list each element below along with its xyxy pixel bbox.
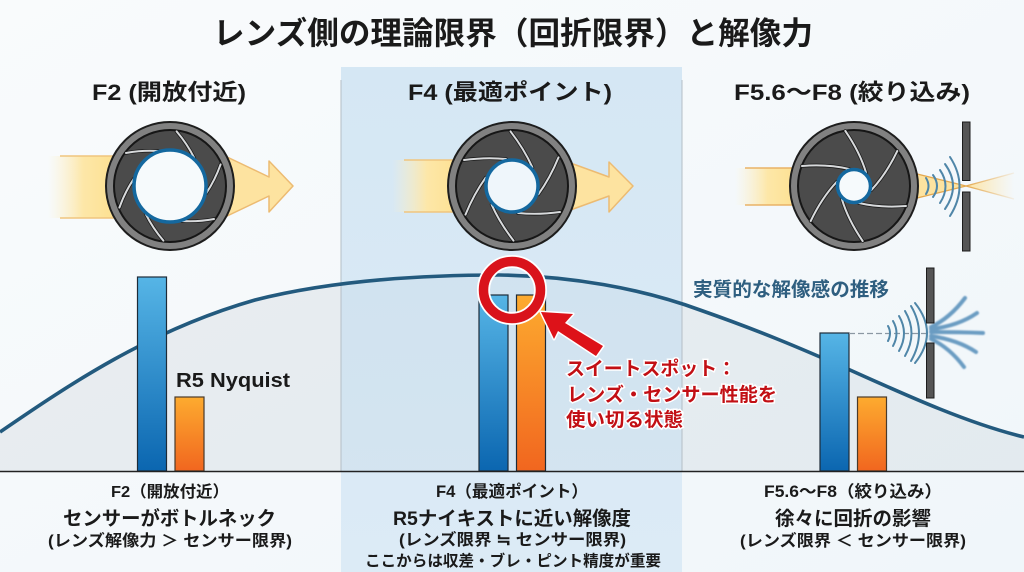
caption: F4: R5ナイキストに近い解像度 xyxy=(393,508,631,530)
caption: F2: センサーがボトルネック xyxy=(63,507,276,530)
callout: sweet spot: スイートスポット： xyxy=(566,357,736,380)
caption: F4: (レンズ限界 ≒ センサー限界) xyxy=(399,530,626,549)
heading: F2: F2 (開放付近) xyxy=(92,80,246,105)
callout: sweet spot xyxy=(566,357,777,431)
resolution curve area xyxy=(0,275,1024,471)
caption: F4: ここからは収差・ブレ・ピント精度が重要 xyxy=(365,551,661,570)
icon: upper sensor slit xyxy=(962,122,970,251)
beam arrow: F2 xyxy=(48,156,293,218)
arrow: pointing at sweet spot xyxy=(541,312,603,356)
icon: diffraction waves and scatter at lower slit xyxy=(888,298,983,367)
beam: F5.6-F8 converging to sensor xyxy=(735,168,1014,205)
bar chart: F4 xyxy=(479,295,546,471)
heading: F4: F4 (最適ポイント) xyxy=(408,80,612,105)
beam arrow: F4 xyxy=(392,160,633,212)
caption: F2: (レンズ解像力 ＞ センサー限界) xyxy=(48,531,292,550)
bar chart: F2 xyxy=(138,277,204,471)
center panel curve area xyxy=(0,275,700,471)
caption: F4 xyxy=(365,481,661,570)
caption: F5.6-F8: F5.6～F8（絞り込み） xyxy=(764,482,942,501)
caption: F5.6-F8: (レンズ限界 ＜ センサー限界) xyxy=(740,531,966,550)
caption: F5.6-F8 xyxy=(740,482,966,550)
icon: diffraction waves at upper slit xyxy=(926,157,960,216)
aperture icon: F4 xyxy=(448,122,576,250)
panel: center highlight xyxy=(341,67,682,572)
icon: sweet spot circle xyxy=(484,262,540,318)
aperture icon: F2 xyxy=(106,122,234,250)
callout: sweet spot: レンズ・センサー性能を xyxy=(567,383,777,406)
callout: sweet spot: 使い切る状態 xyxy=(566,408,683,431)
bar chart: F5.6-F8 xyxy=(820,333,886,471)
caption: F2 xyxy=(48,483,292,550)
caption: F4: F4（最適ポイント） xyxy=(436,481,588,501)
title: レンズ側の理論限界（回折限界）と解像力 xyxy=(213,15,813,51)
curve label: 実質的な解像感の推移 xyxy=(693,278,889,301)
aperture icon: F5.6-F8 xyxy=(790,122,918,250)
caption: F5.6-F8: 徐々に回折の影響 xyxy=(775,508,931,530)
resolution curve xyxy=(0,275,1024,437)
heading: F5.6-F8: F5.6～F8 (絞り込み) xyxy=(734,80,970,105)
icon: lower sensor slit xyxy=(926,268,934,398)
caption: F2: F2（開放付近） xyxy=(111,483,229,501)
label: R5 Nyquist: R5 Nyquist xyxy=(176,369,290,392)
dashed leader to lower slit xyxy=(849,332,928,334)
baseline xyxy=(0,470,1024,472)
